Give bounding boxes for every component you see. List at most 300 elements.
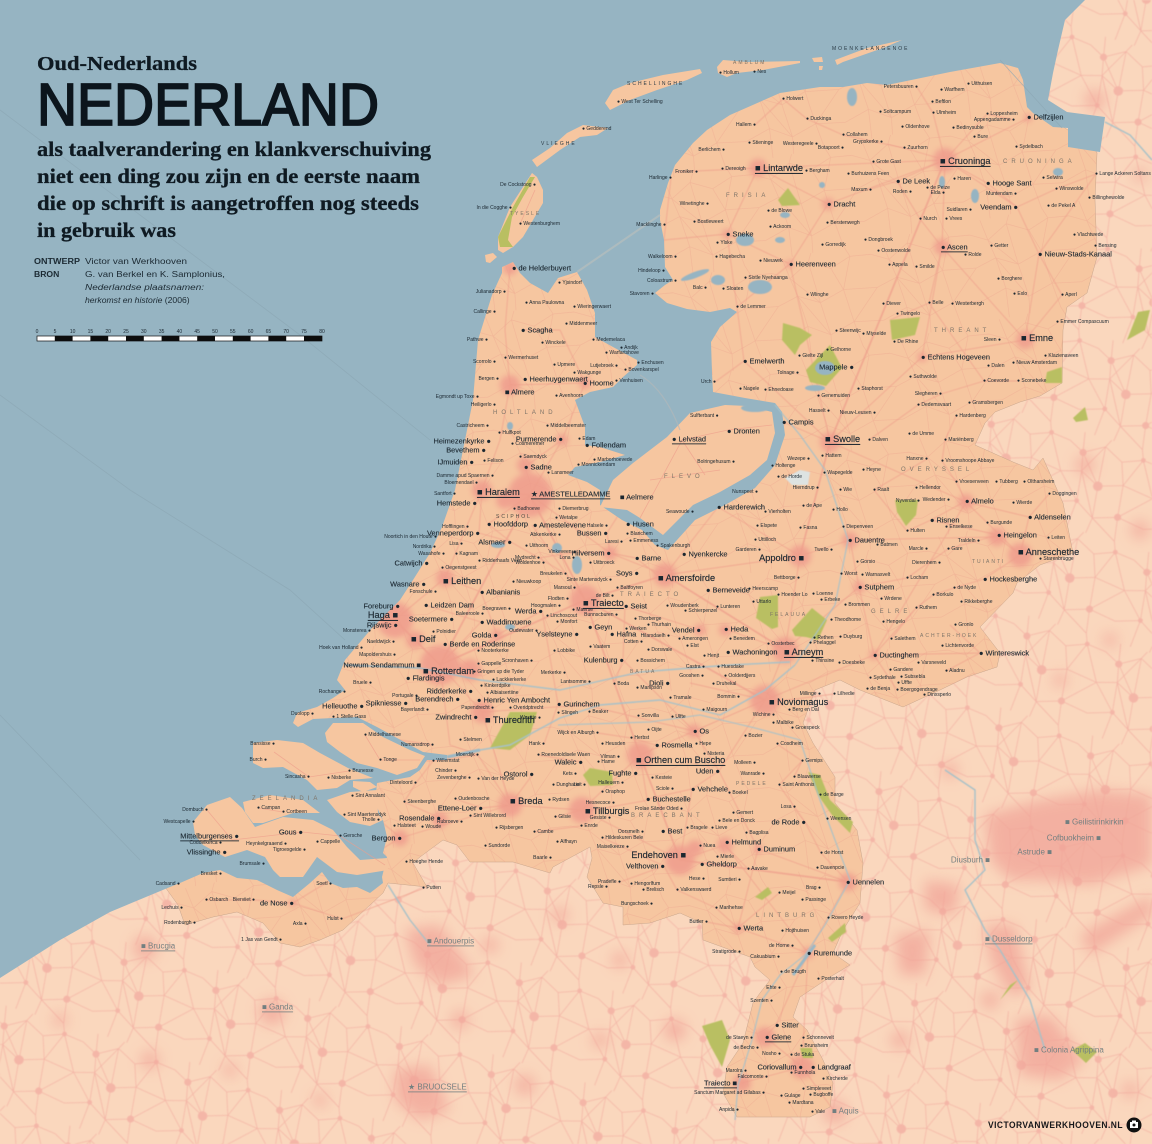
place labels: Amsterdam and South Holland: ● Henjt bbox=[703, 653, 720, 659]
place labels: Amsterdam and South Holland: Hoogmalen ● bbox=[531, 603, 561, 609]
region names: TUIANTI bbox=[972, 559, 1005, 565]
place labels: Brabant: ● Bozier bbox=[744, 733, 763, 739]
place labels: Overijssel and Gelderland: ● Lichtenvorde bbox=[941, 643, 974, 649]
place labels: Zeeland and West-Brabant: Bierviiet ● bbox=[233, 897, 255, 903]
place labels: Amsterdam and South Holland: Bruele ● bbox=[353, 680, 372, 686]
place labels: Brabant: ● Groespeck bbox=[791, 725, 820, 731]
place labels: Groningen and Drenthe: ● Hooge Sant bbox=[986, 178, 1032, 188]
place labels: Brabant: ● Oijte bbox=[647, 727, 662, 733]
place labels: Groningen and Drenthe: ● Ulmheim bbox=[932, 110, 956, 116]
place labels: Amsterdam and South Holland: ● Slingeh bbox=[557, 710, 578, 716]
place labels: Friesland: ● Ackoom bbox=[769, 224, 791, 230]
region names: OVERYSSEL bbox=[901, 467, 973, 473]
place labels: Overijssel and Gelderland: ● Hengelo bbox=[882, 619, 905, 625]
place labels: Amsterdam and South Holland: ● Marlipson bbox=[636, 685, 662, 691]
place labels: Amsterdam and South Holland: ● Kinkerdpike bbox=[480, 683, 511, 689]
place labels: Amsterdam and South Holland: Westtie ● bbox=[520, 715, 541, 721]
place labels: Overijssel and Gelderland: ● Gorsio bbox=[856, 559, 875, 565]
place labels: Zeeland and West-Brabant: ● Cortbeen bbox=[282, 809, 307, 815]
place labels: Groningen and Drenthe: ● Sydelbach bbox=[1015, 144, 1043, 150]
place labels: Overijssel and Gelderland: ● de Ape bbox=[802, 503, 822, 509]
place labels: Groningen and Drenthe: ● Genemuiden bbox=[817, 393, 850, 399]
place labels: Amsterdam and South Holland: ● Sonvilla bbox=[637, 713, 659, 719]
place labels: Amsterdam and South Holland: ● Seist bbox=[624, 602, 647, 610]
region names: HOLTLAND bbox=[493, 410, 557, 416]
place labels: Groningen and Drenthe bbox=[817, 81, 1151, 399]
place labels: Brabant: ● de Horst bbox=[820, 850, 844, 856]
place labels: Amsterdam and South Holland: ● Oegenstgeest bbox=[441, 565, 477, 571]
place labels: Overijssel and Gelderland: ● Heingelon bbox=[997, 530, 1037, 540]
place labels: Groningen and Drenthe: ● Borghere bbox=[997, 276, 1022, 282]
place labels: Friesland: ● Sneke bbox=[726, 230, 753, 238]
place labels: Overijssel and Gelderland: ● Vroesenveen bbox=[955, 479, 989, 485]
place labels: Limburg: ● Posterhalt bbox=[817, 976, 845, 982]
place labels: Amsterdam and South Holland: Sinte Martensdyck ● bbox=[566, 577, 612, 583]
subtitle: niet een ding zou zijn en de eerste naam bbox=[37, 164, 420, 188]
place labels: Brabant: Molleen ● bbox=[734, 760, 756, 766]
place labels: Zeeland and West-Brabant: ● Putten bbox=[422, 885, 441, 891]
place labels: Amsterdam and South Holland: Breukelen ● bbox=[540, 571, 567, 577]
place labels: Overijssel and Gelderland: ● Rethen bbox=[813, 635, 834, 641]
place labels: Overijssel and Gelderland: ● Hardenberg bbox=[955, 413, 986, 419]
foreign place names: ■ Aquis bbox=[832, 1106, 859, 1116]
place labels: Overijssel and Gelderland: ■ Arneym bbox=[784, 647, 824, 657]
place labels: Limburg: ● Mardtana bbox=[788, 1100, 814, 1106]
place labels: Amsterdam and South Holland: ● Waddinxuene bbox=[480, 618, 531, 626]
place labels: Brabant: Pradefle ● bbox=[598, 879, 621, 885]
place labels: Amsterdam and South Holland: Wasnare ● bbox=[390, 580, 426, 588]
region names: TYESLE bbox=[510, 211, 541, 217]
place labels: Zeeland and West-Brabant: Zevenberghe ● bbox=[437, 775, 471, 781]
place labels: Friesland: ● Ylske bbox=[716, 240, 733, 246]
place labels: Groningen and Drenthe: ● de Pekel A bbox=[1047, 203, 1076, 209]
scale bar: 5 bbox=[54, 329, 57, 335]
place labels: Wadden and North Holland: ● Heerhuygenwaert bbox=[523, 374, 588, 384]
place labels: Amsterdam and South Holland: Catwijch ● bbox=[395, 558, 429, 568]
place labels: Friesland: ● Stieninge bbox=[748, 140, 773, 146]
place labels: Amsterdam and South Holland: ● Bossichem bbox=[636, 658, 665, 664]
subtitle: die op schrift is aangetroffen nog steeds bbox=[37, 191, 419, 215]
place labels: Groningen and Drenthe: ● Winswolde bbox=[1055, 186, 1084, 192]
place labels: Limburg: Ehte ● bbox=[766, 985, 781, 991]
place labels: Overijssel and Gelderland: ● Wierde bbox=[1012, 500, 1032, 506]
place labels: Overijssel and Gelderland: ● Dalven bbox=[868, 437, 888, 443]
place labels: Wadden and North Holland: ● Wakgunge bbox=[573, 370, 601, 376]
place labels: Friesland: Winetinghe ● bbox=[680, 201, 709, 207]
place labels: Brabant: ● Meijel bbox=[778, 890, 795, 896]
place labels: Zeeland and West-Brabant: ● Oudenbosche bbox=[454, 796, 490, 802]
place labels: Groningen and Drenthe: ● Twingelo bbox=[896, 311, 920, 317]
place labels: Friesland: ● Duckinga bbox=[806, 116, 831, 122]
place labels: Groningen and Drenthe: ● Coevorde bbox=[983, 378, 1009, 384]
place labels: Amsterdam and South Holland: Castra ● bbox=[686, 664, 705, 670]
place labels: Amsterdam and South Holland: ● Maigourn bbox=[702, 707, 727, 713]
place labels: Amsterdam and South Holland: ● Vaatem bbox=[589, 644, 610, 650]
place labels: Friesland: ● de Lemmer bbox=[736, 304, 766, 310]
place labels: Amsterdam and South Holland: ● Thurhain bbox=[647, 622, 671, 628]
place labels: Wadden and North Holland: ● de Helderbuyert bbox=[512, 264, 571, 272]
place labels: Overijssel and Gelderland: Traldeln ● bbox=[958, 538, 980, 544]
place labels: Overijssel and Gelderland: Sulfterbant ● bbox=[690, 413, 719, 419]
place labels: Brabant bbox=[504, 720, 884, 911]
place labels: Overijssel and Gelderland: ● de Nyde bbox=[953, 585, 976, 591]
place labels: Amsterdam and South Holland: Baleeroole ● bbox=[456, 611, 484, 617]
place labels: Wadden and North Holland: ● Marborhoevede bbox=[593, 457, 633, 463]
place labels: Wadden and North Holland: In die Cogghe ● bbox=[476, 205, 512, 211]
place labels: Overijssel and Gelderland: ● Wapegelde bbox=[823, 470, 853, 476]
place labels: Brabant: ● Rydsen bbox=[548, 797, 570, 803]
scale bar: 60 bbox=[248, 329, 254, 335]
place labels: Zeeland and West-Brabant: ● Tonge bbox=[379, 757, 397, 763]
region names: THREANT bbox=[934, 328, 990, 334]
place labels: Wadden and North Holland: Scorrolo ● bbox=[473, 359, 496, 365]
place labels: Brabant: Brag ● bbox=[806, 885, 821, 891]
place labels: Friesland: ● Burhuizens Feen bbox=[847, 171, 889, 177]
place labels: Zeeland and West-Brabant: Bresket ● bbox=[201, 871, 222, 877]
place labels: Amsterdam and South Holland: ● Heda bbox=[724, 624, 749, 634]
place labels: Wadden and North Holland: ● Anna Paulowna bbox=[525, 300, 564, 306]
place labels: Friesland: ● Nagele bbox=[739, 386, 759, 392]
place labels: Wadden and North Holland: ● West Ter Schelling bbox=[617, 99, 663, 105]
place labels: Overijssel and Gelderland: ● de Benja bbox=[866, 686, 890, 692]
delta and island road lines bbox=[207, 190, 772, 865]
place labels: Wadden and North Holland: ● Warfartshove bbox=[605, 350, 639, 356]
place labels: Brabant: ● Weensen bbox=[826, 816, 852, 822]
place labels: Brabant: ● Herbst bbox=[630, 735, 650, 741]
place labels: Wadden and North Holland: Callinge ● bbox=[474, 309, 496, 315]
place labels: Zeeland and West-Brabant: Moerdijk ● bbox=[456, 752, 479, 758]
place labels: Overijssel and Gelderland: Hasselt ● bbox=[809, 408, 830, 414]
place labels: Brabant: ● Buchestelle bbox=[646, 794, 691, 804]
place labels: Groningen and Drenthe: ● Oldenhove bbox=[901, 124, 930, 130]
place labels: Wadden and North Holland: ● Avenhoorn bbox=[555, 393, 583, 399]
place labels: Amsterdam and South Holland: Golda ● bbox=[472, 630, 498, 640]
place labels: Amsterdam and South Holland: Haga ■ bbox=[368, 610, 398, 620]
place labels: Amsterdam and South Holland: ● Amerongen bbox=[678, 636, 708, 642]
place labels: Brabant: ● Cosdheim bbox=[776, 741, 803, 747]
place labels: Zeeland and West-Brabant: Dombuch ● bbox=[182, 807, 208, 813]
place labels: Brabant: ● Vehchele bbox=[691, 784, 728, 794]
place labels: Brabant: Kets ● bbox=[563, 771, 577, 777]
place labels: Amsterdam and South Holland: ■ Leithen bbox=[443, 576, 481, 586]
place labels: Groningen and Drenthe: ● Loppesheim bbox=[986, 111, 1018, 117]
foreign place names: ■ Colonia Agrippina bbox=[1034, 1046, 1104, 1054]
place labels: Limburg: Anpida ● bbox=[719, 1107, 739, 1113]
place labels: Limburg: ● Hojthuisen bbox=[781, 928, 809, 934]
region names: CRUONINGA bbox=[1003, 159, 1076, 165]
place labels: Brabant: ● Hengorlfum bbox=[630, 881, 660, 887]
place labels: Brabant: Hank ● bbox=[529, 741, 545, 747]
place labels: Overijssel and Gelderland: ● Aladnu bbox=[945, 668, 965, 674]
place labels: Overijssel and Gelderland: ● Duyburg bbox=[839, 634, 863, 640]
place labels: Amsterdam and South Holland: ● Hoofddorp bbox=[487, 520, 528, 528]
place labels: Limburg: ● Funnhola bbox=[790, 1070, 815, 1076]
place labels: Overijssel and Gelderland: Seawoude ● bbox=[666, 509, 694, 515]
place labels: Overijssel and Gelderland: ● Hockesberghe bbox=[983, 574, 1037, 584]
place labels: Zeeland and West-Brabant: ● Sint Annalant bbox=[351, 793, 385, 799]
place labels: Brabant: ● Gheldorp bbox=[700, 860, 737, 868]
place labels: Amsterdam and South Holland: Papendrecht ● bbox=[461, 705, 494, 711]
place labels: Wadden and North Holland: ● Middelbeemster bbox=[546, 423, 586, 429]
foreign place names: ■ Geilistirinkirkin bbox=[1065, 818, 1124, 826]
place labels: Limburg: ● de Brugth bbox=[780, 969, 806, 975]
place labels: Amsterdam and South Holland: Boegraven ● bbox=[482, 606, 511, 612]
place labels: Amsterdam and South Holland: ● Werken bbox=[625, 626, 647, 632]
place labels: Limburg: ● Sitter bbox=[775, 1020, 799, 1030]
place labels: Friesland: ● Dongbroek bbox=[864, 237, 893, 243]
place labels: Limburg: Szenten ● bbox=[750, 998, 773, 1004]
foreign place names: Cofbuokheim ■ bbox=[1047, 834, 1101, 842]
place labels: Friesland: Froniker ● bbox=[675, 169, 698, 175]
place labels: Brabant: de Rode ● bbox=[772, 818, 806, 826]
place labels: Friesland: ● de Blowe bbox=[767, 208, 792, 214]
place labels: Overijssel and Gelderland: ● Varsneveld bbox=[917, 660, 946, 666]
place labels: Brabant: Maiselkeeze ● bbox=[597, 844, 629, 850]
scale bar: 0 bbox=[36, 329, 39, 335]
place labels: Wadden and North Holland: IJmuiden ● bbox=[437, 458, 474, 466]
place labels: Overijssel and Gelderland: ● Gronlo bbox=[954, 622, 974, 628]
place labels: Brabant: Waleic ● bbox=[555, 758, 583, 766]
place labels: Limburg: Traiecto ■ bbox=[704, 1078, 738, 1088]
place labels: Overijssel and Gelderland: ● de Horde bbox=[777, 474, 802, 480]
place labels: Amsterdam and South Holland: ● Amestelevene bbox=[533, 520, 586, 530]
region names: ACHTER-HOEK bbox=[920, 633, 978, 639]
place labels: Limburg: ● Rovero Heyde bbox=[827, 915, 864, 921]
place labels: Amsterdam and South Holland: ● Polnidier bbox=[432, 629, 456, 635]
place labels: Amsterdam and South Holland: ★ AMESTELLEDAMME bbox=[531, 490, 610, 498]
place labels: Zeeland and West-Brabant: Rosendale ● bbox=[399, 814, 441, 822]
place labels: Brabant: ● Heusden bbox=[601, 741, 626, 747]
place labels: Brabant: ● Os bbox=[693, 726, 709, 736]
place labels: Wadden and North Holland: ● Wermerhuset bbox=[504, 355, 539, 361]
place labels: Amsterdam and South Holland: ● Henric Yen Ambocht bbox=[477, 696, 550, 704]
region names: SCIPHOL bbox=[496, 514, 532, 520]
place labels: Friesland: Hallem ● bbox=[736, 122, 756, 128]
place labels: Groningen and Drenthe: ● De Rhine bbox=[893, 339, 918, 345]
place labels: Amsterdam and South Holland: Helleuothe ● bbox=[322, 702, 364, 710]
place labels: Amsterdam and South Holland: Lona ● bbox=[559, 555, 575, 561]
place labels: Brabant: Hesnecoce ● bbox=[586, 800, 615, 806]
place labels: Wadden and North Holland: ● Medemelaca bbox=[592, 337, 625, 343]
place labels: Overijssel and Gelderland: ● Wintereswick bbox=[979, 648, 1029, 658]
place labels: Brabant: Frolae Sânde Oded ● bbox=[635, 806, 683, 812]
place labels: Overijssel and Gelderland: ● Loenne bbox=[812, 591, 833, 597]
place labels: Brabant: Losa ● bbox=[781, 804, 796, 810]
place labels: Groningen and Drenthe: ● Miyselde bbox=[862, 331, 886, 337]
place labels: Groningen and Drenthe: ● Ascen bbox=[941, 242, 968, 252]
place labels: Overijssel and Gelderland: ● Dronten bbox=[727, 426, 760, 436]
place labels: Amsterdam and South Holland: Soetermere ● bbox=[409, 614, 454, 624]
place labels: Limburg: ● de Stuka bbox=[790, 1052, 814, 1058]
place labels: Overijssel and Gelderland: ● Ductinghem bbox=[873, 650, 919, 660]
region names: ZEELANDIA bbox=[252, 796, 321, 802]
place labels: Brabant: Uden ● bbox=[696, 766, 720, 776]
place labels: Amsterdam and South Holland: Naeldwijck ● bbox=[367, 639, 395, 645]
place labels: Wadden and North Holland: ● Hulfkpot bbox=[498, 430, 521, 436]
place labels: Groningen and Drenthe: Roden ● bbox=[893, 189, 912, 195]
place labels: Friesland: Harlinge ● bbox=[649, 175, 672, 181]
place labels: Amsterdam and South Holland: ● Geyn bbox=[588, 622, 612, 632]
place labels: Overijssel and Gelderland: ● Heyne bbox=[862, 467, 881, 473]
place labels: Groningen and Drenthe: ● Aperl bbox=[1061, 292, 1077, 298]
place labels: Zeeland and West-Brabant: Westcapelle ● bbox=[163, 819, 195, 825]
place labels: Wadden and North Holland: ● Edam bbox=[578, 436, 595, 442]
foreign place names: ★ BRUOCSELE bbox=[408, 1082, 467, 1092]
place labels: Groningen and Drenthe: ● Emmer Compascuum bbox=[1056, 319, 1109, 325]
place labels: Brabant: Hese ● bbox=[689, 876, 705, 882]
place labels: Overijssel and Gelderland: ● Almelo bbox=[965, 496, 994, 506]
credits: BRON bbox=[34, 269, 59, 279]
place labels: Amsterdam and South Holland: Fonschule ● bbox=[410, 589, 437, 595]
place labels: Zeeland and West-Brabant: Gous ● bbox=[279, 828, 303, 836]
place labels: Overijssel and Gelderland: ● Dauentre bbox=[848, 536, 885, 544]
place labels: Groningen and Drenthe: ● Suthwolde bbox=[909, 374, 937, 380]
place labels: Brabant: Repsle ● bbox=[588, 884, 608, 890]
place labels: Zeeland and West-Brabant: ● Campan bbox=[257, 805, 281, 811]
place labels: Zeeland and West-Brabant: ● Gersche bbox=[339, 833, 363, 839]
place labels: Overijssel and Gelderland: ● Lelvstad bbox=[672, 434, 706, 444]
foreign place names: ■ Andouerpis bbox=[427, 936, 474, 946]
place labels: Wadden and North Holland: Egmondt up Toxe ● bbox=[436, 394, 479, 400]
place labels: Amsterdam and South Holland: ● Oolderdjjers bbox=[724, 673, 756, 679]
place labels: Amsterdam and South Holland: Hilarsdaelh ● bbox=[641, 633, 670, 639]
place labels: Overijssel and Gelderland: Twello ● bbox=[814, 547, 833, 553]
place labels: Wadden and North Holland: ● Enchusen bbox=[637, 360, 664, 366]
place labels: Amsterdam and South Holland: Mapoldershuis ● bbox=[359, 652, 396, 658]
place labels: Limburg: ● Landgraaf bbox=[811, 1062, 852, 1072]
place labels: Zeeland and West-Brabant: Mittelburgenses ● bbox=[180, 832, 239, 840]
place labels: Overijssel and Gelderland: ● Hattem bbox=[821, 453, 842, 459]
foreign place names: ■ Dusseldorp bbox=[985, 934, 1033, 944]
place labels: Amsterdam and South Holland bbox=[291, 487, 777, 725]
place labels: Zeeland and West-Brabant: Sincasha ● bbox=[285, 774, 310, 780]
place labels: Wadden and North Holland: Pathwe ● bbox=[467, 337, 488, 343]
place labels: Brabant: Gesiste ● bbox=[590, 815, 611, 821]
place labels: Zeeland and West-Brabant: Brumsale ● bbox=[239, 861, 265, 867]
region names: FRISIA bbox=[726, 193, 769, 199]
place labels: Limburg: Buitler ● bbox=[689, 919, 708, 925]
place labels: Friesland: Hindeloop ● bbox=[638, 268, 665, 274]
place labels: Amsterdam and South Holland: ● Uitbroeck bbox=[589, 560, 615, 566]
place labels: Amsterdam and South Holland: ● Ridderhaafs Veen bbox=[478, 558, 522, 564]
place labels: Groningen and Drenthe: ● Vrees bbox=[945, 216, 963, 222]
place labels: Limburg bbox=[689, 915, 864, 1115]
place labels: Brabant: ● Saint Anthonis bbox=[778, 782, 815, 788]
place labels: Overijssel and Gelderland: ● Heerscamp bbox=[748, 586, 778, 592]
place labels: Wadden and North Holland: Heimezenkyrke ● bbox=[434, 436, 491, 446]
place labels: Brabant: ● Boekel bbox=[728, 790, 748, 796]
place labels: Brabant: ● Bagplisa bbox=[745, 830, 769, 836]
place labels: Brabant: ● Lieve bbox=[711, 825, 728, 831]
place labels: Friesland: ■ Lintarwde bbox=[755, 163, 803, 173]
place labels: Overijssel and Gelderland: ● Berg en Dal bbox=[788, 707, 819, 713]
place labels: Groningen and Drenthe: ● Exlo bbox=[1013, 291, 1027, 297]
place labels: Zeeland and West-Brabant: Tigroexgelde ● bbox=[273, 847, 306, 853]
place labels: Friesland: ● Wlinghe bbox=[806, 292, 829, 298]
foreign place names: Astrude ■ bbox=[1017, 848, 1052, 856]
place labels: Groningen and Drenthe: Suidlaren ● bbox=[946, 207, 972, 213]
place labels: Wadden and North Holland: ● Yjsindorf bbox=[558, 280, 582, 286]
place labels: Brabant: ● Passinge bbox=[801, 897, 826, 903]
place labels: Overijssel and Gelderland: ■ Noviomagus bbox=[769, 697, 829, 707]
place labels: Wadden and North Holland: ● Gedderend bbox=[582, 126, 612, 132]
place labels: Amsterdam and South Holland: Cotten ● bbox=[624, 639, 643, 645]
place labels: Brabant: ● Kesteie bbox=[651, 775, 672, 781]
place labels: Brabant: ● Nuea bbox=[699, 843, 716, 849]
place labels: Limburg: Coriovallum ● bbox=[757, 1062, 803, 1072]
place labels: Groningen and Drenthe: ● Steenwijc bbox=[835, 328, 861, 334]
place labels: Limburg: Stratigrode ● bbox=[712, 949, 741, 955]
place labels: Overijssel and Gelderland: ● Diepenveen bbox=[842, 524, 873, 530]
place labels: Overijssel and Gelderland: Hierndrup ● bbox=[793, 485, 819, 491]
place labels: Overijssel and Gelderland: ● Brommen bbox=[844, 602, 870, 608]
place labels: Overijssel and Gelderland: ● Lilhedie bbox=[833, 691, 855, 697]
place labels: Amsterdam and South Holland: ● Ulfte bbox=[671, 714, 686, 720]
place labels: Overijssel and Gelderland: ● Sydethale bbox=[869, 675, 896, 681]
scale bar: 30 bbox=[141, 329, 147, 335]
scale bar: 65 bbox=[266, 329, 271, 335]
place labels: Overijssel and Gelderland: Dierenhem ● bbox=[912, 560, 941, 566]
region names bbox=[252, 46, 1076, 919]
place labels: Groningen and Drenthe: ● Nurch bbox=[919, 216, 937, 222]
place labels: Zeeland and West-Brabant: ● Stelmen bbox=[459, 737, 482, 743]
place labels: Amsterdam and South Holland: ● Nooterkerke bbox=[477, 648, 509, 654]
place labels: Limburg: ● Ruremunde bbox=[807, 948, 852, 958]
place labels: Brabant: ● Uennelen bbox=[846, 878, 884, 886]
place labels: Brabant: Ostorol ● bbox=[504, 770, 534, 778]
scale bar: 40 bbox=[177, 329, 182, 335]
place labels: Brabant: ● Helmund bbox=[725, 838, 761, 846]
place labels: Amsterdam and South Holland: ● Flardingis bbox=[406, 674, 445, 682]
place labels: Brabant: ● Oraphop bbox=[601, 789, 625, 795]
place labels: Wadden and North Holland: ● Venhuisen bbox=[615, 378, 643, 384]
place labels: Amsterdam and South Holland: Bommin ● bbox=[717, 694, 740, 700]
place labels: Brabant: ● Nisteria bbox=[703, 751, 725, 757]
place labels: Amsterdam and South Holland: Zwindrecht ● bbox=[435, 712, 478, 722]
place labels: Zeeland and West-Brabant: Soetl ● bbox=[316, 881, 332, 887]
place labels: Amsterdam and South Holland: Spikniesse ● bbox=[366, 698, 408, 708]
place labels: Brabant: ● Blauwerse bbox=[793, 774, 821, 780]
place labels: Zeeland and West-Brabant: ● Cappelle bbox=[316, 839, 340, 845]
kicker: Oud-Nederlands: Oud-Nederlands bbox=[37, 53, 197, 75]
place labels: Amsterdam and South Holland: ● Hafna bbox=[610, 630, 637, 638]
place labels: Friesland: ● Berstenwegh bbox=[826, 220, 860, 226]
place labels: Wadden and North Holland: ● Wieringerwaert bbox=[573, 304, 612, 310]
place labels: Overijssel and Gelderland: ● Uttarlo bbox=[752, 599, 771, 605]
place labels: Amsterdam and South Holland: ● Monfort bbox=[556, 619, 578, 625]
place labels: Overijssel and Gelderland: ● Vroomshoope Abbaye bbox=[941, 458, 995, 464]
place labels: Overijssel and Gelderland: ● Uffte bbox=[897, 680, 912, 686]
place labels: Groningen and Drenthe: ● Nieuw-Stads-Kanaal bbox=[1038, 250, 1112, 258]
place labels: Amsterdam and South Holland: Abkenkerke ● bbox=[530, 532, 561, 538]
place labels: Amsterdam and South Holland: Bunnscburen ● bbox=[584, 612, 618, 618]
place labels: Brabant: ● de Barge bbox=[819, 792, 844, 798]
place labels: Amsterdam and South Holland: Soys ● bbox=[616, 568, 639, 578]
place labels: Amsterdam and South Holland: ● Tramale bbox=[669, 695, 692, 701]
place labels: Overijssel and Gelderland: ■ Anneschethe bbox=[1018, 547, 1079, 557]
place labels: Brabant: Sumtieri ● bbox=[718, 877, 741, 883]
place labels: Overijssel and Gelderland: ● de Umme bbox=[908, 431, 934, 437]
place labels: Brabant: ● Alfhayn bbox=[556, 839, 577, 845]
place labels: Amsterdam and South Holland: Hoek van Holland ● bbox=[319, 645, 363, 651]
place labels: Amsterdam and South Holland: Kulenburg ● bbox=[584, 656, 624, 664]
scale bar: 15 bbox=[88, 329, 93, 335]
place labels: Limburg: de Becho ● bbox=[733, 1045, 759, 1051]
place labels: Friesland: Grypskerke ● bbox=[853, 139, 883, 145]
place labels: Wadden and North Holland: ■ Almere bbox=[505, 388, 535, 396]
place labels: Friesland: Macklinghe ● bbox=[636, 222, 666, 228]
place labels: Amsterdam and South Holland: Newum Sendammum ■ bbox=[343, 660, 422, 670]
